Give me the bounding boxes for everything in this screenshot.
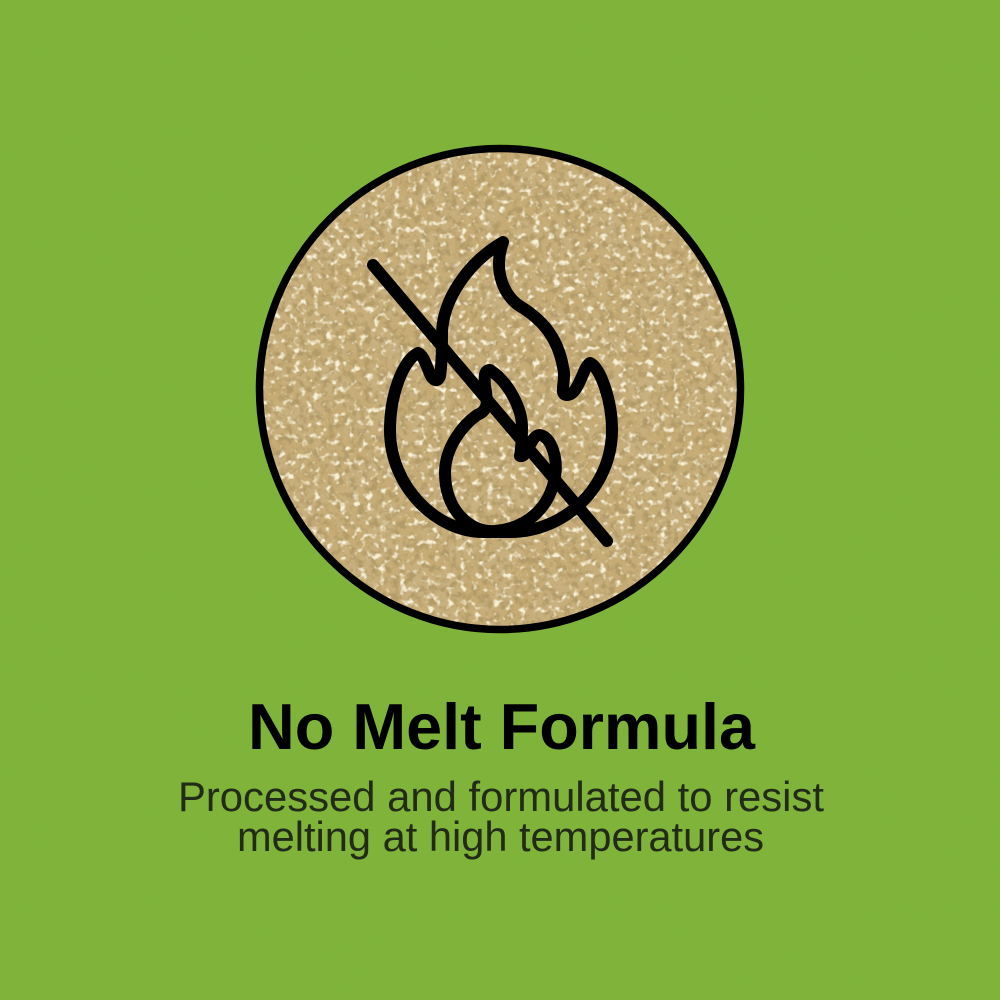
description: Processed and formulated to resist xyxy=(178,773,824,820)
slash xyxy=(373,265,607,541)
title: No Melt Formula xyxy=(248,690,756,763)
inner flame xyxy=(445,370,556,531)
description: melting at high temperatures xyxy=(237,813,764,860)
panel: textured grain circle xyxy=(256,145,744,633)
description xyxy=(178,773,824,860)
outer flame xyxy=(390,242,612,532)
icon: crossed-out flame xyxy=(373,242,612,541)
